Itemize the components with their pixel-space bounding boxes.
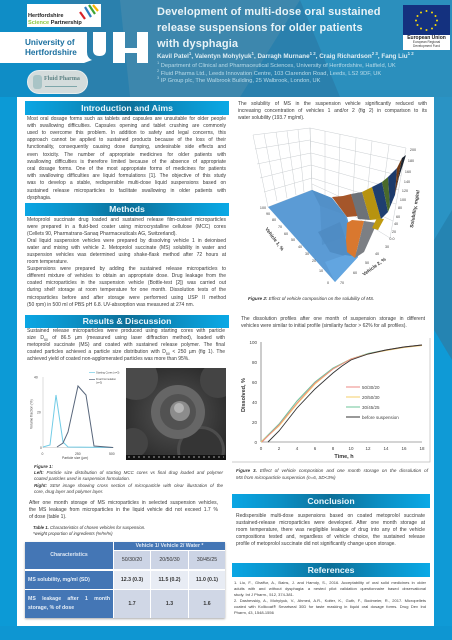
chart: dissolution profiles: 8 [332,446,335,451]
chart: 3D solubility surface: 90 [266,212,270,216]
chart: 3D solubility surface: 120 [402,189,408,193]
chart: 3D solubility surface: 50 [291,238,295,242]
text: dissolution paragraph [241,316,425,329]
text: methods: microparticles before and after storage were performed using USP II method [27,295,226,301]
chart: 3D solubility surface: 60 [396,215,400,219]
logo: European Union flag [403,5,450,50]
cell: 20/50/30: 20/50/30 [159,557,180,563]
chart: particle size distribution: 500 [109,452,115,456]
cell: 20/50/30 [151,551,188,569]
chart: dissolution profiles: 0 [254,440,257,445]
table: vehicle characteristics [25,542,225,618]
text: references [234,580,426,615]
chart: 3D solubility surface: 80 [272,218,276,222]
cell: 1.6 [189,590,225,618]
row: solubility label [25,571,113,589]
chart: dissolution profiles: 16 [401,446,407,451]
surface: blue floor [268,190,358,282]
heading: Results & Discussion: Results & Discussion [83,316,171,326]
heading: References: References [308,565,354,575]
chart: 3D solubility surface: 200 [410,148,416,152]
caption: table 1 [33,525,145,536]
text: methods: different mixture of vehicles to obtain an appropriate dose. Drug leakage from the [27,273,226,279]
text: introduction: sustained release microparticles to facilitate swallowing in older patients with [27,188,226,194]
title: Development of multi-dose oral sustained [157,6,381,18]
text: introduction: oral dosage forms. One of the most appropriate forms of medicines for patients [27,166,226,172]
text: introduction: approach cannot be applied to sustained products because of the loss of their [27,137,226,143]
text: methods: suspension vehicles was determined using shake-flask method after 72 hours at [27,252,226,258]
text: conclusion: profile of metoprolol succinate did not significantly change upon storage. [236,541,396,547]
heading: Conclusion [232,494,430,508]
chart: dissolution profiles: before suspension [362,415,399,420]
chart: dissolution profiles: 14 [383,446,389,451]
text: results intro: metoprolol succinate (MS) and coated with sustained release polymer. The final [27,342,225,348]
row: table header characteristics: Characteristics [50,552,88,558]
text: results intro: size D50 of 86.5 µm (measured using laser diffraction method), loaded with [27,335,225,342]
text: methods: Oral liquid suspension vehicles were prepared by dissolving vehicle 1 in deionised [27,238,226,244]
chart: dissolution profiles: 80 [252,360,257,365]
text: results intro: Sustained release microparticles were produced using starting cores with particle [27,328,225,334]
text: dissolution paragraph: vehicles were similar to initial profile (similarity factor > 62% for all profiles). [241,323,407,329]
chart: particle size distribution: Final Formulation [96,377,117,381]
chart: particle size distribution: 40 [34,376,38,380]
chart: dissolution profiles: 18 [419,446,425,451]
text: University of Hertfordshire: Hertfordshire [25,48,77,57]
text: introduction: even toxicity. The number of appropriate medicines for older patients with [27,152,226,158]
chart: 3D solubility surface: 0.0 [389,237,395,241]
affiliations [157,60,396,84]
caption: table 1: *weight proportion of ingredients (%/%/%) [33,531,113,536]
cell: 11.5: 11.5 (0.2) [159,577,180,583]
chart: 3D solubility surface: 60 [284,232,288,236]
caption: figure 1: Right: SEM image showing cross section of microparticle with clear illustration of the [34,483,223,488]
text: conclusion [236,512,425,547]
cell: 12.3: 12.3 (0.3) [121,577,143,583]
chart: 3D solubility surface: 80 [398,206,402,210]
chart: 3D solubility surface: 30 [305,252,309,256]
caption: figure 1 [34,464,224,494]
chart: 3D solubility surface: 140 [404,180,410,184]
chart: dissolution profiles: 40 [252,400,257,405]
chart: 3D solubility surface: Vehicle 1, % [263,227,285,253]
chart: dissolution profiles: 10 [348,446,354,451]
row: table header characteristics [25,542,113,569]
caption: figure 2: Figure 2: Effect of vehicle composition on the solubility of MS. [248,296,374,301]
logo: European Union flag: Development Fund [413,44,440,48]
text: methods: during shelf storage at room temperature for one month. Dissolution tests of the [27,287,226,293]
text: introduction: Most oral dosage forms such as tablets and capsules are unsuitable for older people [27,116,226,122]
caption: figure 3: MS from microparticle suspension (n=6, SD<3%) [236,475,336,480]
heading: Results & Discussion [25,314,229,328]
chart: dissolution profiles: 50/30/20 [362,385,380,390]
chart: 3D solubility surface: 100 [260,206,266,210]
cell: 1.3: 1.3 [166,601,173,607]
chart: 3D solubility surface: 0 [327,281,329,285]
row: leakage label: MS leakage after 1 month [28,596,110,602]
text: methods: (Cellets 90, Pharmatrans-Sanaq Pharmaceuticals AG, Switzerland). [27,231,177,237]
chart: 3D solubility surface: 160 [405,170,411,174]
chart: dissolution profiles: 12 [365,446,371,451]
chart: dissolution profiles: 30/45/25 [362,405,380,410]
cell: 30/45/25: 30/45/25 [197,557,217,563]
text: leakage paragraph: the MS leakage from microparticles in the liquid vehicle did not exceed 1.7 % [29,507,218,513]
logo: Fluid Pharma [27,70,88,94]
logo: Fluid Pharma: Fluid Pharma [44,76,80,82]
cell: 1.7: 1.7 [128,601,136,607]
caption: figure 1: Left: Particle size distribution of starting MCC cores vs final drug loaded and polymer [34,470,223,475]
text: University of Hertfordshire [25,38,77,57]
text: methods: room temperature. [27,259,68,265]
chart: 3D solubility surface: 20 [392,230,396,234]
text: methods: coated microparticles in the suspension vehicle (Bottle-test [2]) was carried out [27,280,226,286]
chart: particle size distribution: Volume fraction (%) [30,399,34,429]
chart: 3D solubility surface: 30 [385,245,389,249]
heading: Conclusion: Conclusion [307,496,355,506]
chart: dissolution profiles: Dissolved, % [241,378,247,412]
text: references: study. Int J Pharm., 512, 374-381. [234,592,294,597]
chart: dissolution profiles [232,338,430,462]
text: conclusion: sustained-release microparticles were developed. After one month storage at [236,520,425,526]
text: references: coated with Kollicoat® Smartseal 30D for taste masking in liquid oral dosage forms. Drug Dev Ind [234,604,426,609]
chart: 3D solubility surface: 40 [298,245,302,249]
text: introduction: functionality, consequently causing dose dumping, undesirable side effects and [27,144,226,150]
row: leakage label [25,590,113,618]
row: solubility label: MS solubility, mg/ml (SD) [28,577,90,583]
text: introduction: dysphagia. [27,195,51,201]
chart: 3D solubility surface: Vehicle 2, % [362,256,388,278]
heading: Methods [25,202,229,216]
text: conclusion: room temperature, there was negligible leakage of drug into any of the vehicle [236,527,425,533]
chart: dissolution profiles: 60 [252,380,257,385]
title [157,6,381,50]
chart: 3D solubility surface: 40 [394,222,398,226]
chart: 3D solubility surface: 10 [319,269,323,273]
chart: dissolution profiles: 100 [249,340,257,345]
heading: References [232,563,430,577]
text: results intro: achieved yield of coated non-agglomerated particles was more than 95%. [27,356,190,362]
text: solubility paragraph [238,100,427,121]
text: introduction: swallowing difficulties is therefore limited because of the absence of appropriate [27,159,226,165]
text: methods [27,216,226,308]
row: vehicle header: Vehicle 1/ Vehicle 2/ Water * [136,543,203,549]
affiliations: 1 Department of Clinical and Pharmaceutical Sciences, University of Hertfordshire, Hatfield, UK [157,60,396,69]
chart: dissolution profiles: 20 [252,420,257,425]
chart: 3D solubility surface: 20 [312,259,316,263]
chart: dissolution profiles: 0 [260,446,263,451]
text: introduction: was to develop a stable, redispersible multi-dose liquid suspensions based on [27,180,226,186]
cell: 11.0: 11.0 (0.1) [196,577,218,583]
caption: figure 1: core, drug layer and polymer layer. [34,489,103,494]
logo: European Union flag: European Regional [413,40,440,44]
text: conclusion: compositions tested and, regardless of vehicle choice, the sustained release [236,534,425,540]
chart: dissolution profiles: Time, h [334,454,354,460]
chart: 3D solubility surface: 180 [408,159,414,163]
row: vehicle header [114,542,225,550]
chart: dissolution profiles: 20/50/30 [362,395,380,400]
text: dissolution paragraph: The dissolution profiles after one month of suspension storage in different [241,316,425,322]
heading: Methods: Methods [109,204,145,214]
logo: University of Hertfordshire UH [0,32,148,63]
chart: particle size distribution: (n=3) [96,380,102,384]
caption: figure 3 [236,468,428,480]
chart: particle size distribution: 0 [42,452,44,456]
text: references: 2. Dashevskiy, A., Mohylyuk, V., Ahmed, A.R., Kolter, K., Guth, F., Bodmeier, R., 2017. Micropellets [234,598,426,603]
text: references: Pharm, 43, 1548-1556 [234,610,274,615]
logo: Hertfordshire Science Partnership: Hertfordshire [28,13,63,19]
chart: 3D solubility surface: 40 [375,252,379,256]
text: conclusion: Redispersible multi-dose suspensions based on coated metoprolol succinate [236,512,425,518]
chart: 3D solubility surface: 70 [340,281,344,285]
caption: figure 3: Figure 3. Effect of vehicle composition and one month storage on the dissolution of [236,468,428,472]
caption: figure 1: Figure 1: [34,464,53,468]
chart: 3D solubility surface: 100 [400,198,406,202]
row: leakage label: storage, % of dose [28,605,74,611]
heading: Introduction and Aims: Introduction and Aims [81,102,173,112]
text: introduction: used to overcome this problem. In addition to safety and legal concerns, this [27,130,226,136]
logo: Hertfordshire Science Partnership [27,4,101,27]
chart: particle size distribution: 0 [40,446,42,450]
text: methods: were prepared in a fluid-bed coater using microcrystalline cellulose (MCC) cores [27,224,226,230]
chart: 3D solubility surface: 60 [353,271,357,275]
cell: 1.6: 1.6 [203,601,211,607]
chart: dissolution profiles: 2 [278,446,281,451]
text: University of Hertfordshire: University of [25,38,75,47]
chart: 3D solubility surface: 50 [365,261,369,265]
text: methods: (50 rpm) in 500 ml of PBS pH 6.8. UV-absorption was measured at 274 nm. [27,302,194,308]
panel: main white poster [17,97,434,626]
chart: particle size distribution: 250 [75,452,81,456]
cell: 11.0 [189,571,225,589]
caption: table 1: Table 1. Characteristics of chosen vehicles for suspension. [33,525,145,530]
caption: figure 1: coated particles used in suspension formulation. [34,476,130,481]
chart: particle size distribution: 20 [37,410,41,414]
logo: European Union flag: European Union [407,35,446,41]
image: SEM micrograph [126,368,226,460]
surface: coloured bands [332,194,358,217]
text: results intro: coated particles achieved a particle size distribution with D50 < 250 µm (fig 1). The [27,349,225,356]
chart: particle size distribution [30,370,120,460]
text: introduction [27,116,226,201]
cell: 12.3 [114,571,150,589]
text: solubility paragraph: increasing concentration of vehicles 1 and/or 2 (fig 2) in comparison to its [238,108,427,114]
text: leakage paragraph: After one month storage of MS microparticles in selected suspension vehicles, [29,500,218,506]
text: methods: water and mixing with vehicle 2. Metoprolol succinate (MS) solubility in water and [27,245,226,251]
heading: Introduction and Aims [25,100,229,114]
text: introduction: with swallowing difficulties are liquid formulations [1]. The objective of this study [27,173,226,179]
text: references: adults with and without dysphagia: a nested pilot validation questionnaire based observational [234,586,426,591]
title: with dysphagia [157,38,238,50]
text: leakage paragraph: of dose (table 1). [29,514,67,520]
text: results intro [27,328,225,362]
chart: particle size distribution: Starting Cores (n=3) [96,370,120,374]
cell: 50/30/20: 50/30/20 [122,557,142,563]
affiliations: 2 Fluid Pharma Ltd., Leeds Innovation Centre, 103 Clarendon Road, Leeds, LS2 9DF, UK [157,68,381,77]
chart: dissolution profiles: 6 [314,446,317,451]
cell: 50/30/20 [114,551,150,569]
chart: dissolution profiles: 4 [296,446,299,451]
text: solubility paragraph: The solubility of MS in the suspension vehicle significantly reduced with [238,100,427,106]
cell: 1.3 [151,590,188,618]
text: solubility paragraph: water solubility (193.7 mg/ml). [238,115,304,121]
cell: 1.7 [114,590,150,618]
chart: particle size distribution: Particle size (µm) [62,456,88,460]
title: release suspensions for older patients [157,22,363,34]
text: methods: Suspensions were prepared by adding the sustained release microparticles to [27,266,226,272]
cell: 30/45/25 [189,551,225,569]
text: leakage paragraph [29,500,218,520]
text: introduction: with swallowing difficulties. Capsules opening and tablet crushing are commonly [27,123,226,129]
logo: Hertfordshire Science Partnership: Science Partnership [28,20,82,26]
authors: Kavil Patel1, Valentyn Mohylyuk1, Darragh Murnane1 2, Craig Richardson2 3, Fang Liu1 2 [157,51,414,60]
chart: 3D solubility surface: 70 [278,225,282,229]
cell: 11.5 [151,571,188,589]
text: methods: Metoprolol succinate drug loaded and sustained release film-coated microparticles [27,216,226,222]
chart: 3D solubility surface [252,128,422,285]
chart: 3D solubility surface: Solubility, mg/ml [409,190,422,228]
affiliations: 3 IP Group plc, The Walbrook Building, 25 Walbrook, London, UK [157,75,320,84]
text: references: 1. Liu, F., Ghaffur, A., Bains, J. and Hamdy, S., 2016. Acceptability of oral solid medicines in older [234,580,426,585]
